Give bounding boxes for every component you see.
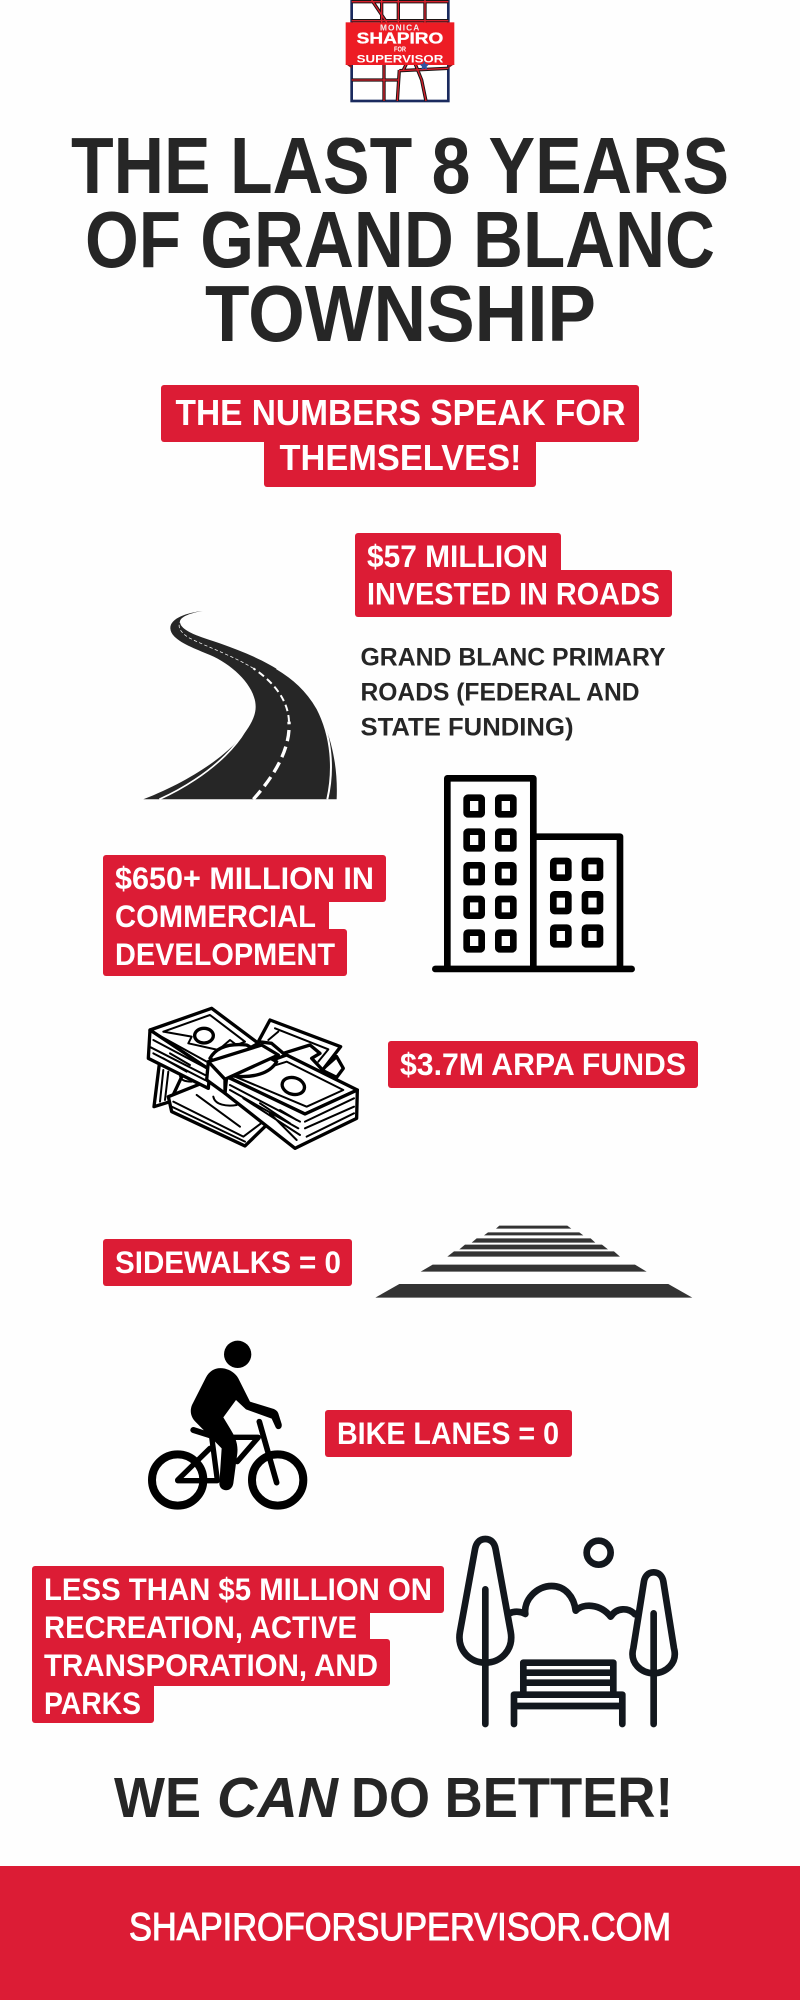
logo: Monica Shapiro for Supervisor: FOR [394, 47, 406, 54]
callout: recreation and parks: TRANSPORATION, AND [44, 1647, 378, 1683]
title [71, 121, 729, 358]
title: TOWNSHIP [205, 269, 596, 358]
website address: SHAPIROFORSUPERVISOR.COM [129, 1906, 671, 1949]
logo: Monica Shapiro for Supervisor: SHAPIRO [357, 30, 443, 47]
callout: commercial development: $650+ MILLION IN [115, 860, 374, 896]
callout: sidewalks: SIDEWALKS = 0 [115, 1244, 341, 1280]
subtitle pill [161, 385, 639, 487]
callout: $57 million in roads [355, 533, 672, 617]
callout: commercial development: COMMERCIAL [115, 898, 316, 934]
icon: stacks of money [148, 1008, 357, 1148]
icon: park with bench and trees [459, 1539, 675, 1724]
logo: Monica Shapiro for Supervisor [346, 0, 454, 101]
closing statement: CAN [217, 1766, 340, 1830]
text block: primary roads [360, 644, 666, 742]
callout: recreation and parks: LESS THAN $5 MILLION ON [44, 1571, 432, 1607]
callout: bike lanes: BIKE LANES = 0 [337, 1415, 559, 1451]
closing statement [114, 1766, 673, 1830]
closing statement: WE [114, 1766, 201, 1830]
callout: ARPA funds: $3.7M ARPA FUNDS [400, 1046, 686, 1082]
callout: recreation and parks: RECREATION, ACTIVE [44, 1609, 357, 1645]
text block: primary roads: GRAND BLANC PRIMARY [360, 644, 666, 672]
text block: primary roads: ROADS (FEDERAL AND [360, 678, 640, 706]
icon: buildings [435, 778, 632, 969]
logo: Monica Shapiro for Supervisor: MONICA [380, 23, 419, 33]
subtitle pill: THEMSELVES! [280, 437, 522, 478]
logo: Monica Shapiro for Supervisor: SUPERVISOR [357, 54, 443, 66]
text block: primary roads: STATE FUNDING) [360, 714, 574, 742]
callout: commercial development: DEVELOPMENT [115, 936, 335, 972]
icon: winding road [143, 611, 337, 799]
closing statement: DO BETTER! [351, 1766, 673, 1830]
icon: cyclist [152, 1341, 303, 1506]
footer banner [0, 1866, 800, 2000]
title: OF GRAND BLANC [85, 195, 715, 284]
callout: commercial development [103, 855, 386, 976]
callout: recreation and parks: PARKS [44, 1685, 141, 1721]
callout: recreation and parks [32, 1566, 444, 1723]
subtitle pill: THE NUMBERS SPEAK FOR [176, 392, 626, 433]
callout: $57 million in roads: INVESTED IN ROADS [367, 576, 660, 612]
icon: crosswalk [375, 1226, 692, 1298]
callout: $57 million in roads: $57 MILLION [367, 538, 548, 574]
